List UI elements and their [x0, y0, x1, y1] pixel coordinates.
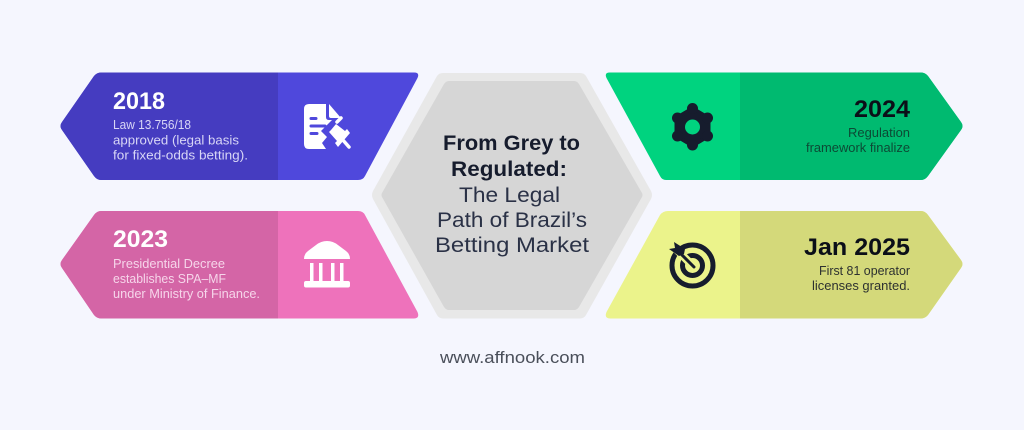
title: Betting Market — [435, 234, 589, 257]
description: 2023: establishes SPA–MF — [113, 271, 226, 286]
infographic canvas — [60, 72, 962, 363]
panel: 2018 milestone — [60, 72, 418, 180]
card dark section: 2023 — [60, 211, 278, 318]
hexagon outer ring — [372, 73, 652, 318]
panel: central hexagon — [372, 73, 652, 318]
title: From Grey to — [443, 132, 580, 155]
icon: document with gavel — [304, 104, 350, 149]
card shape: 2023 — [60, 211, 418, 318]
title: The Legal — [459, 184, 560, 207]
description: 2024: framework finalize — [806, 140, 910, 155]
year: 2023: 2023 — [113, 226, 168, 253]
card shape: 2024 — [606, 72, 962, 180]
title: Path of Brazil’s — [437, 209, 587, 232]
panel: 2023 milestone — [60, 211, 418, 318]
description: 2024: Regulation — [848, 125, 910, 140]
description: 2018: for fixed-odds betting). — [113, 148, 248, 162]
card dark section: Jan 2025 — [740, 211, 962, 318]
description: Jan 2025: licenses granted. — [812, 278, 910, 293]
card dark section: 2024 — [740, 72, 962, 180]
description: 2023: under Ministry of Finance. — [113, 286, 260, 301]
card shape: Jan 2025 — [606, 211, 962, 318]
description: 2023: Presidential Decree — [113, 256, 225, 271]
hexagon inner — [382, 81, 642, 310]
card dark section: 2018 — [60, 72, 278, 180]
panel: Jan 2025 milestone — [606, 211, 962, 318]
description: 2018: approved (legal basis — [113, 132, 240, 148]
icon: government building — [304, 241, 350, 288]
description: 2023 — [113, 256, 260, 301]
icon: target with arrow — [669, 242, 713, 286]
description: 2018 — [113, 117, 248, 162]
description: Jan 2025 — [812, 263, 911, 293]
description: 2024 — [806, 125, 910, 155]
year: 2018: 2018 — [113, 88, 165, 115]
title: Regulated: — [451, 158, 567, 181]
description: 2018: Law 13.756/18 — [113, 117, 191, 132]
card shape: 2018 — [60, 72, 418, 180]
website footer: www.affnook.com — [439, 348, 585, 367]
title — [435, 132, 589, 257]
icon: gear — [672, 103, 713, 150]
description: Jan 2025: First 81 operator — [819, 263, 911, 278]
year: Jan 2025: Jan 2025 — [804, 234, 910, 261]
panel: 2024 milestone — [606, 72, 962, 180]
year: 2024: 2024 — [854, 96, 911, 123]
